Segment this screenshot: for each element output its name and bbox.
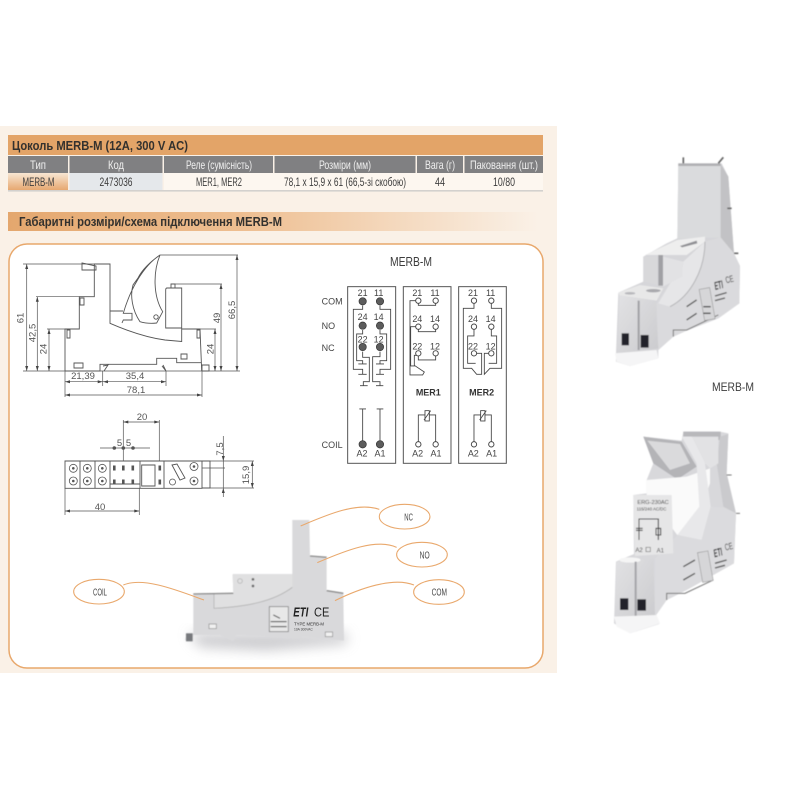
table title: Цоколь MERB-M (12A, 300 V AC) [12, 139, 188, 153]
photo: socket with relay and module: ERG-230AC [637, 500, 669, 506]
table data row: 10/80 [493, 175, 515, 189]
section heading bar [8, 212, 538, 231]
table header row: Розміри (мм) [319, 158, 371, 172]
callout: NC: NC [404, 512, 413, 523]
schematic: MER1: 24 [412, 314, 422, 324]
terminal labels: NO [322, 321, 335, 331]
schematic: socket: 12 [374, 334, 384, 344]
section heading bar: Габаритні розміри/схема підключення MERB-M [19, 215, 282, 229]
callout: COIL [74, 579, 204, 604]
table data row [8, 173, 543, 192]
schematic: MER2: 21 [468, 288, 478, 298]
callout: COIL: COIL [93, 587, 107, 598]
socket markings: CE [314, 605, 329, 620]
labelled socket photo with callouts [74, 504, 464, 650]
table header row: Вага (г) [425, 158, 455, 172]
photo: MERB-M socket 3D view [615, 157, 740, 366]
table data row: 2473036 [100, 175, 133, 189]
schematic: socket: A1 [374, 449, 385, 459]
schematic: MER1: A2 [412, 449, 423, 459]
terminal labels [322, 297, 343, 450]
top-view dimension drawing [65, 412, 254, 515]
terminal labels: COIL [322, 440, 343, 450]
top-view dimension drawing: 5 [126, 438, 131, 449]
table header row: Тип [30, 158, 46, 172]
callout: NO [317, 542, 447, 567]
schematic: MER1: MER1 [416, 387, 441, 397]
photo: socket with relay and module: 115/240 AC/DC [637, 507, 666, 512]
socket markings: ETI [293, 605, 309, 620]
schematic: MER1: 11 [430, 288, 440, 298]
photo: socket with relay and module: A2 [635, 548, 643, 554]
schematic: MER2: MER2 [469, 387, 494, 397]
table data row: 78,1 x 15,9 x 61 (66,5-зі скобою) [284, 175, 406, 189]
socket markings [293, 605, 329, 632]
top-view dimension drawing: 7,5 [215, 442, 226, 456]
photo: socket with relay and module: ETI [712, 546, 724, 560]
terminal labels: NC [322, 343, 335, 353]
table header row [8, 156, 543, 173]
table: MERB-M socket specifications [8, 135, 543, 192]
dimension labels: 78,1 [127, 385, 145, 396]
wiring diagrams [322, 287, 506, 463]
photo: MERB-M socket 3D view: CE [724, 274, 735, 285]
schematic: MER2: 11 [486, 288, 495, 298]
top-view dimension drawing: 15,9 [241, 466, 252, 484]
schematic: MER1: 22 [412, 341, 422, 351]
photo: socket with relay and module: CE [724, 541, 734, 553]
schematic: MER1: 21 [412, 288, 422, 298]
terminal labels: COM [322, 297, 343, 307]
schematic: MER2: 22 [468, 341, 478, 351]
schematic: MER2: A2 [468, 449, 479, 459]
schematic: socket: 14 [374, 312, 384, 322]
schematic: MER1: 14 [430, 314, 440, 324]
callout: COM [335, 580, 464, 604]
schematic: MER2: 12 [486, 341, 496, 351]
socket markings: TYPE MERB-M [294, 621, 324, 626]
photo shadow [188, 633, 347, 650]
wiring title: MERB-M [390, 254, 432, 269]
schematic: socket: 24 [358, 312, 368, 322]
photo: socket with relay and module [614, 432, 740, 633]
dimension labels: 24 [206, 344, 216, 354]
dimension labels: 35,4 [126, 371, 144, 382]
cream background panel [0, 126, 557, 673]
top-view dimension drawing: 20 [137, 412, 147, 423]
table header row: Код [108, 158, 124, 172]
dimension labels: 66,5 [227, 301, 238, 319]
dimension lines [23, 255, 240, 397]
schematic: MER1 [403, 287, 451, 463]
table data row: MER1, MER2 [196, 175, 242, 189]
schematic: socket [348, 287, 396, 463]
schematic: MER2: 14 [486, 314, 496, 324]
dimension labels [16, 301, 238, 396]
dimension labels: 42,5 [28, 324, 38, 342]
schematic: MER1: 12 [430, 341, 440, 351]
schematic: MER2: A1 [486, 449, 497, 459]
schematic: MER1: A1 [430, 449, 441, 459]
callout: COM: COM [432, 588, 447, 599]
top-view dimension drawing: 40 [95, 502, 105, 513]
socket body [185, 520, 344, 642]
table header row: Реле (сумісність) [186, 158, 252, 172]
socket markings: 10A 300VAC [294, 628, 313, 632]
table header row: Паковання (шт.) [470, 158, 538, 172]
table title [8, 135, 543, 155]
table data row: MERB-M [22, 175, 54, 189]
schematic: socket: A2 [356, 449, 367, 459]
top-view dimension drawing: 5 [117, 438, 122, 449]
schematic: socket: 11 [374, 288, 383, 298]
caption: MERB-M: MERB-M [712, 380, 754, 394]
photo: MERB-M socket 3D view: ETI [713, 279, 725, 293]
schematic: MER2 [459, 287, 506, 463]
dimension labels: 61 [16, 313, 26, 323]
dimension labels: 21,39 [71, 371, 95, 382]
dimension labels: 24 [38, 344, 50, 354]
schematic: MER2: 24 [468, 314, 478, 324]
dimension labels: 49 [212, 313, 223, 323]
schematic: socket: 21 [358, 288, 368, 298]
panel: dimensions and wiring [9, 244, 543, 668]
table data row: 44 [435, 175, 445, 189]
side-view dimension drawing [16, 255, 240, 397]
callout: NO: NO [420, 550, 430, 561]
photo: socket with relay and module: A1 [657, 549, 665, 555]
schematic: socket: 22 [358, 334, 368, 344]
callout: NC [301, 504, 430, 529]
